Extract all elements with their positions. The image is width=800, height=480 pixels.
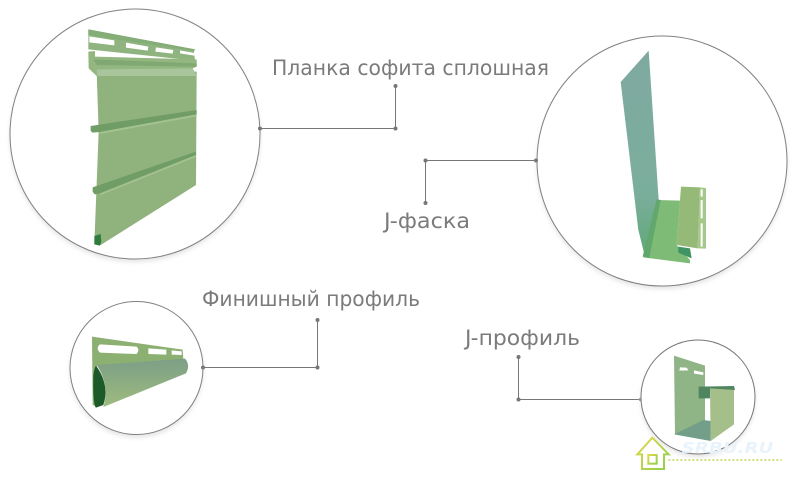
title: J-профиль: J-профиль bbox=[463, 326, 580, 351]
title: Финишный профиль: Финишный профиль bbox=[202, 287, 420, 312]
panel: planka sofita circle bbox=[10, 9, 260, 262]
dotted line bbox=[668, 457, 782, 463]
title: J-фаска: J-фаска bbox=[382, 209, 470, 234]
text: watermark: SRBU.RU bbox=[682, 439, 774, 457]
icon: j-profile bbox=[674, 356, 735, 441]
watermark: site logo bbox=[637, 438, 782, 469]
icon: finish profile bbox=[92, 337, 188, 408]
connector: planka bbox=[258, 84, 398, 130]
connector: j-profile bbox=[516, 355, 643, 402]
connector: finish profile bbox=[201, 318, 320, 370]
panel: finish profile circle bbox=[70, 302, 203, 438]
title: Планка софита сплошная: Планка софита сплошная bbox=[272, 56, 549, 81]
connector: j-facet bbox=[424, 158, 538, 205]
panel: j-profile circle bbox=[641, 340, 755, 457]
icon: house logo bbox=[637, 438, 669, 469]
icon: soffit panel bbox=[88, 29, 197, 246]
icon: j-facet profile bbox=[621, 51, 706, 263]
panel: j-facet circle bbox=[537, 36, 787, 289]
